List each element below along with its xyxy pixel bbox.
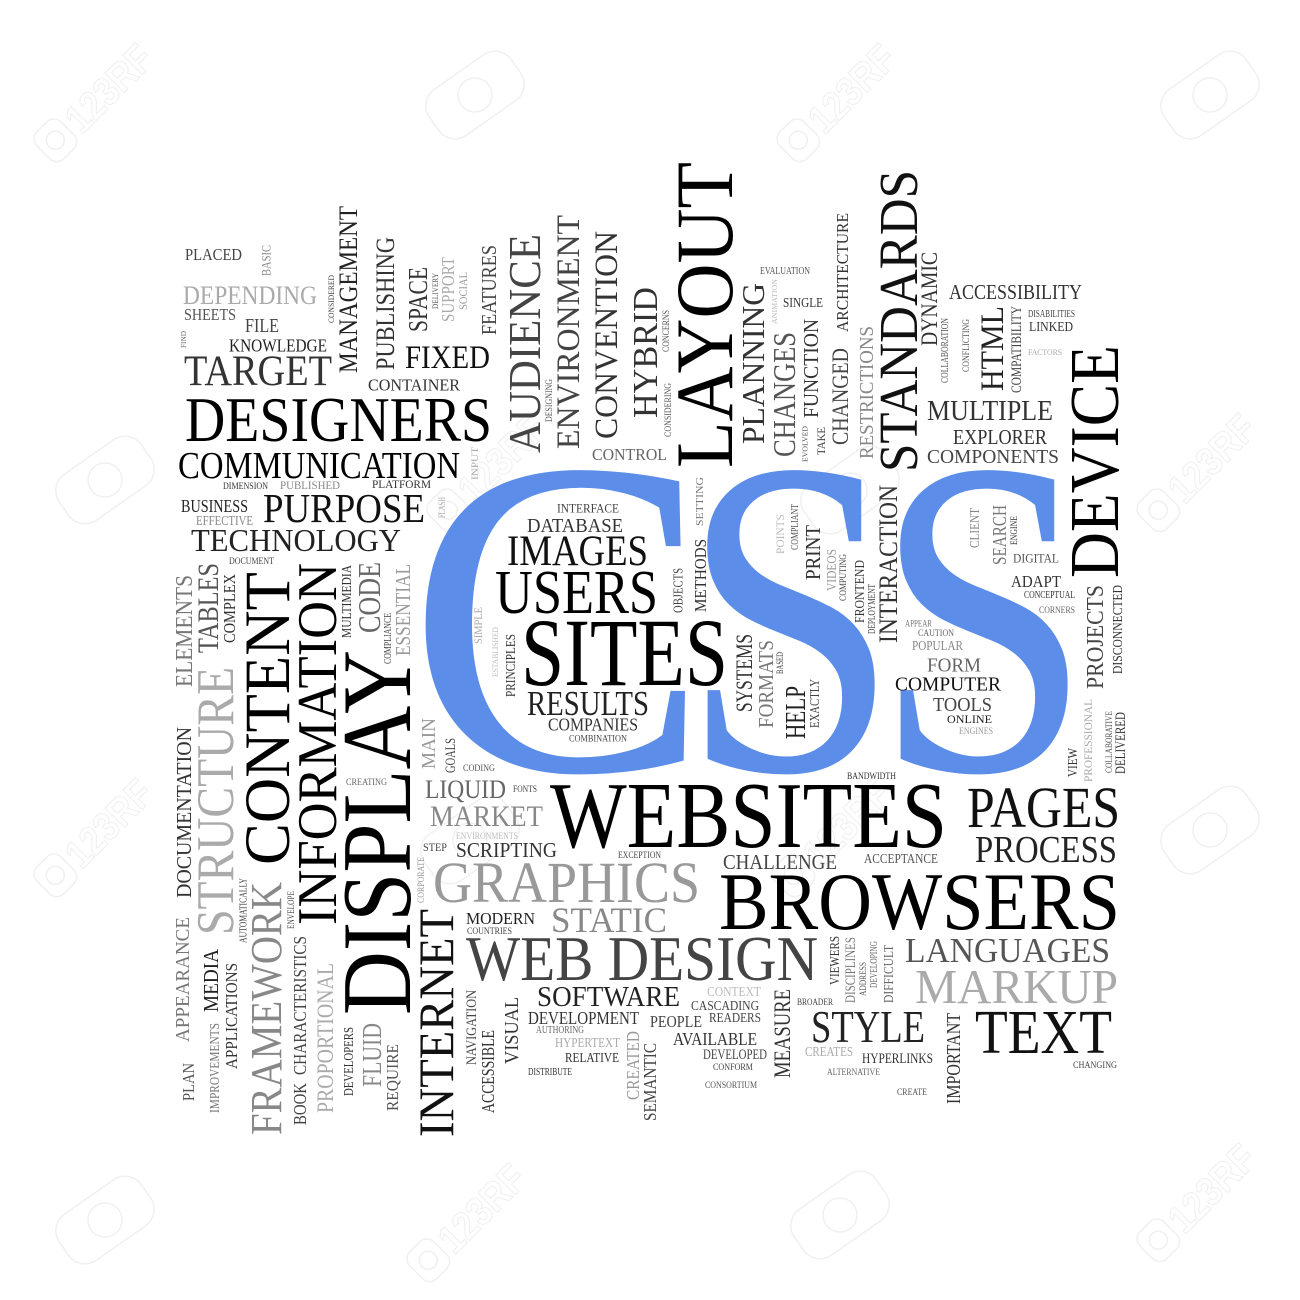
words: inside second S and right edge: CLIENT [967,507,982,548]
words: between C and first S: POINTS [773,514,787,554]
words: horizontal, top left block: COMMUNICATION [178,445,460,487]
words: inside second S and right edge: POPULAR [912,638,963,653]
words: bottom right block: CREATE [897,1087,927,1097]
words: vertical, top left block: SPACE [403,267,433,332]
words: inside second S and right edge: DELIVERED [1113,712,1129,774]
words: top right block: COMPONENTS [927,446,1059,468]
words: bottom centre block: ACCESSIBLE [478,1030,498,1113]
words: bottom right block: MARKUP [915,959,1118,1014]
words: left column vertical block: APPEARANCE [172,917,194,1042]
words: horizontal, top left block: KNOWLEDGE [229,336,327,356]
title: large blue CSS letters: C [407,368,710,869]
words: small horizontal labels top middle: SINGLE [783,295,823,310]
words: vertical, top middle block: DESIGNING [544,379,554,422]
words: left column vertical block: MEDIA [199,948,223,1012]
words: horizontal, top left block: DOCUMENT [229,556,274,566]
word: LAYOUT: LAYOUT [659,162,750,468]
words: bottom centre block: STATIC [551,900,667,940]
words: bottom centre block: MODERN [466,909,535,928]
words: horizontal, top left block: FIXED [405,340,490,376]
words: vertical, top middle block: ENVIRONMENT [551,215,587,449]
words: left column vertical block [172,562,495,1137]
words: inside letter C: DATABASE [527,515,623,537]
words: left column vertical block: AUTOMATICALLY [238,878,250,943]
words: left column vertical block: COMPLEX [220,574,239,643]
words: top right block: STANDARDS [868,170,929,472]
words: bottom centre block: CONSORTIUM [705,1080,757,1090]
words: bottom centre block: MARKET [430,800,543,833]
words: vertical, top left block: INPUT [470,446,480,480]
words: bottom right block: DEVELOPING [869,941,880,988]
words: between C and first S: VIDEOS [824,549,839,591]
words: inside second S and right edge: ONLINE [947,712,992,726]
word: DEVICE: DEVICE [1057,345,1134,578]
words: inside second S and right edge: COLLABORATIVE [1104,711,1114,773]
words: left column vertical block: PROPORTIONAL [313,963,338,1113]
words: inside second S and right edge: FORM [927,654,981,676]
words: horizontal, top left block: PUBLISHED [280,478,340,492]
words: vertical, top left block: MANAGEMENT [334,206,363,373]
words: horizontal, top left block: EFFECTIVE [196,513,253,528]
words: horizontal, top left block: DIMENSION [223,481,268,491]
words: bottom right block: VIEWERS [827,936,842,985]
words: inside letter C: SIMPLE [471,607,485,644]
words: left column vertical block: COMPLIANCE [383,613,394,664]
words: vertical, top left block: DELIVERY [430,273,440,309]
words: horizontal, top left block: PLATFORM [372,477,431,491]
words: small horizontal labels top middle: EVALUATION [760,266,810,277]
words: bottom centre block: EXCEPTION [618,850,661,860]
words: vertical, top middle block: RESTRICTIONS [856,326,878,459]
words: top right block: MULTIPLE [927,395,1053,427]
words: horizontal, top left block: TARGET [184,348,332,395]
words: left column vertical block: STEP [423,840,447,854]
words: bottom right block: IMPORTANT [943,1013,965,1104]
words: top right block [868,170,1134,578]
words: vertical, top middle block [499,162,878,468]
words: left column vertical block: DOCUMENTATION [172,727,196,898]
words: left column vertical block: IMPROVEMENTS [207,1023,222,1113]
word: CONTENT: CONTENT [232,572,304,865]
words: inside second S and right edge: APPEAR [905,618,932,628]
words: bottom right block [719,775,1120,1104]
words: inside letter C: INTERFACE [557,500,619,516]
words: vertical, top middle block: ARCHITECTURE [833,213,852,332]
words: inside second S and right edge: VIEW [1065,748,1080,777]
words: bottom centre block: AVAILABLE [673,1029,757,1049]
words: bottom centre block: DEVELOPMENT [528,1008,639,1028]
words: vertical, top middle block: CONVENTION [589,231,625,439]
words: bottom centre block: SOFTWARE [537,981,680,1013]
words: inside letter C [471,500,728,744]
words: top right block: FACTORS [1028,347,1062,357]
words: top right block: COMPATIBILITY [1009,306,1025,393]
words: bottom centre block: MEASURE [770,989,795,1078]
word: CONTROL: CONTROL [592,445,667,464]
words: left column vertical block: BOOK [290,1083,310,1125]
words: between C and first S: SYSTEMS [732,634,757,712]
words: left column vertical block: TABLES [192,563,225,653]
words: top right block: ACCESSIBILITY [949,280,1082,304]
words: inside second S and right edge: DISCONNECTED [1110,585,1125,674]
words: bottom centre block: LIQUID [425,775,506,804]
words: top right block: EXPLORER [953,425,1047,449]
words: vertical, top middle block: ANIMATION [770,278,779,324]
words: inside letter C: ESTABLISHED [490,627,500,677]
word: TEXT: TEXT [975,999,1112,1067]
words: bottom right block: PROCESS [975,829,1117,871]
words: left column vertical block: ENVELOPE [286,891,296,929]
words: bottom centre block: NAVIGATION [464,990,480,1065]
words: vertical, top middle block: CHANGED [828,348,853,445]
words: inside second S and right edge: DIGITAL [1013,550,1059,566]
words: top right block: DYNAMIC [917,252,942,346]
words: left column vertical block: CODING [463,763,495,773]
word: WEB DESIGN: WEB DESIGN [466,923,818,994]
words: between C and first S: COMPUTING [838,554,848,601]
title: large blue CSS letters: S [874,367,1092,868]
words: bottom centre block: DISTRIBUTE [528,1067,572,1078]
words: bottom centre block: SCRIPTING [456,838,557,862]
words: inside second S and right edge: CAUTION [918,628,954,638]
words: vertical, top middle block: TAKE [814,427,828,455]
words: bottom right block: HYPERLINKS [862,1051,933,1067]
words: left column vertical block: GOALS [443,738,459,773]
words: bottom centre block [425,764,947,1121]
words: bottom centre block: CASCADING [691,998,759,1013]
words: inside second S and right edge: COMPUTER [895,674,1002,696]
words: vertical, top middle block: CONSIDERING [663,383,673,437]
words: left column vertical block: CHARACTERISTICS [290,936,310,1075]
words: vertical, top middle block: EVOLVED [800,425,810,462]
words: between C and first S: METHODS [691,539,710,612]
words: horizontal, top left block: PLACED [185,245,242,264]
words: between C and first S: INTERACTION [874,485,903,643]
words: horizontal, top left block: DESIGNERS [185,384,492,455]
words: vertical, top left block: PUBLISHING [371,237,400,370]
words: inside letter C: IMAGES [507,528,648,575]
words: between C and first S: FRONTEND [852,560,867,623]
words: bottom centre block: FONTS [513,784,537,794]
words: left column vertical block: MULTIMEDIA [339,565,354,638]
watermark tiles: 123RF [57,36,162,142]
words: bottom centre block: ENVIRONMENTS [456,831,518,841]
words: bottom centre block: COUNTRIES [467,926,512,936]
words: bottom right block: CHANGING [1073,1060,1117,1070]
words: vertical, top left block: FEATURES [477,245,501,335]
title: large blue CSS letters [407,367,1092,869]
title: large blue CSS letters: S [681,367,899,868]
words: inside second S and right edge: ADAPT [1011,572,1062,591]
words: between C and first S [670,477,903,739]
words: left column vertical block: PLAN [179,1063,198,1101]
words: inside second S and right edge: SEARCH [989,505,1011,565]
words: horizontal, top left block: BUSINESS [181,496,248,516]
words: top right block: CONFLICTING [961,319,971,372]
words: inside second S and right edge: BANDWIDTH [847,771,896,781]
words: bottom centre block: HYPERTEXT [555,1035,621,1050]
words: top right block: LINKED [1029,319,1073,334]
words: inside second S and right edge: PROFESSIONAL [1081,699,1095,782]
watermark tiles: 123RF [450,406,555,512]
words: left column vertical block: FLUID [357,1023,387,1087]
words: bottom right block: CREATES [805,1044,853,1059]
words: bottom right block: STYLE [811,1001,925,1052]
words: left column vertical block: CORPORATE [416,857,426,903]
words: inside letter C: COMPANIES [548,714,638,734]
word: FRAMEWORK: FRAMEWORK [242,882,291,1135]
words: bottom centre block: CONFORM [713,1062,753,1072]
words: left column vertical block: APPLICATIONS [222,963,241,1069]
words: left column vertical block: DEVELOPERS [341,1027,356,1096]
words: left column vertical block: STRUCTURE [187,667,245,935]
words: left column vertical block: REQUIRE [383,1044,402,1111]
words: vertical, top left block: SOCIAL [456,272,470,310]
words: left column vertical block: ELEMENTS [172,575,198,687]
words: vertical, top middle block: PLANNING [735,283,771,444]
words: bottom centre block: CONTEXT [707,984,762,999]
words: inside second S and right edge: ENGINES [959,726,993,736]
words: bottom centre block: VISUAL [501,997,523,1064]
watermark tiles: 123RF [57,771,162,877]
words: bottom centre block: PEOPLE [650,1012,702,1031]
words: horizontal, top left block: CONTAINER [368,376,461,394]
words: inside second S and right edge: CONCEPTUAL [1024,590,1075,601]
word: INFORMATION: INFORMATION [287,563,349,925]
words: bottom centre block: ACCEPTANCE [864,851,938,866]
words: bottom centre block: CHALLENGE [723,850,837,874]
words: small horizontal labels top middle [760,266,823,310]
word: SITES: SITES [521,599,728,706]
words: bottom centre block: READERS [709,1010,761,1025]
words: vertical, top left block: FIND [179,330,188,348]
words: between C and first S: PRINT [801,525,825,580]
words: inside second S and right edge: TOOLS [933,694,992,716]
watermark tiles: 123RF [795,771,900,877]
watermark tiles: 123RF [1160,1136,1265,1242]
words: vertical, top middle block: CHANGES [766,332,802,457]
words: inside second S and right edge: CORNERS [1039,605,1075,615]
words: left column vertical block: ESSENTIAL [391,564,415,656]
words: bottom centre block: SEMANTIC [640,1043,660,1121]
words: horizontal, top left block: SHEETS [184,305,236,324]
words: vertical, top left block [179,206,501,518]
words: vertical, top middle block: AUDIENCE [499,234,550,453]
words: inside letter C: USERS [495,559,658,627]
words: left column vertical block: MAIN [418,718,440,769]
words: vertical, top middle block: CONCERNS [661,310,671,352]
word: WEBSITES: WEBSITES [550,764,947,868]
words: bottom centre block: DEVELOPED [703,1047,767,1063]
words: between C and first S: BASED [775,652,785,674]
words: bottom right block: LANGUAGES [905,931,1110,970]
words: vertical, top middle block: HYBRID [626,287,665,418]
words: between C and first S: HELP [780,686,812,739]
words: left column vertical block: CODE [351,562,387,633]
words: horizontal, top left block: FILE [245,315,279,337]
word: BROWSERS: BROWSERS [719,856,1120,947]
word: DISPLAY: DISPLAY [323,650,432,1015]
words: inside letter C: PRINCIPLES [503,634,518,697]
words: top right block: COLLABORATION [940,318,951,383]
words: vertical, top left block: BASIC [258,245,274,276]
words: between C and first S: OBJECTS [670,568,686,613]
words: horizontal, top left block: PURPOSE [263,485,425,531]
word: INTERNET: INTERNET [408,909,464,1137]
words: top right block: DISABILITIES [1028,309,1075,320]
words: between C and first S: COMPLIANT [790,504,801,550]
words: bottom centre block: RELATIVE [565,1050,619,1065]
words: between C and first S: SETTING [695,477,706,526]
words: vertical, top left block: FLASH [437,497,447,518]
words: horizontal, top left block: TECHNOLOGY [191,522,401,558]
words: inside second S and right edge [847,505,1129,782]
words: bottom right block: BROADER [797,997,833,1007]
words: inside letter C: RESULTS [527,684,649,723]
watermark tiles: 123RF [800,36,905,142]
words: bottom centre block: AUTHORING [536,1025,584,1036]
watermark tiles: 123RF [430,1156,535,1262]
words: bottom right block: ADDRESS [858,962,868,996]
words: bottom right block: DISCIPLINES [843,937,859,1003]
watermark tiles: 123RF [1160,406,1265,512]
words: between C and first S: DEPLOYMENT [867,584,878,634]
words: between C and first S: FORMATS [754,640,778,728]
words: vertical, top left block: SUPPORT [438,257,458,322]
words: vertical, top middle block: FUNCTION [799,319,823,418]
words: inside letter C: COMBINATION [569,734,627,744]
words: bottom centre block: CREATED [623,1031,643,1100]
words: between C and first S: EXACTLY [807,679,822,728]
words: horizontal, top left block [178,245,492,566]
words: bottom right block: ALTERNATIVE [827,1067,880,1077]
words: vertical, top left block: CONSIDERED [326,275,336,323]
words: inside second S and right edge: PROJECTS [1083,585,1109,689]
words: horizontal, top left block: DEPENDING [183,281,317,310]
words: bottom right block: PAGES [967,775,1120,840]
words: left column vertical block: CREATING [346,777,387,787]
words: inside second S and right edge: ENGINE [1009,516,1019,545]
words: bottom right block: DIFFICULT [881,944,896,1003]
word: GRAPHICS: GRAPHICS [433,850,700,915]
words: top right block: HTML [975,306,1011,391]
